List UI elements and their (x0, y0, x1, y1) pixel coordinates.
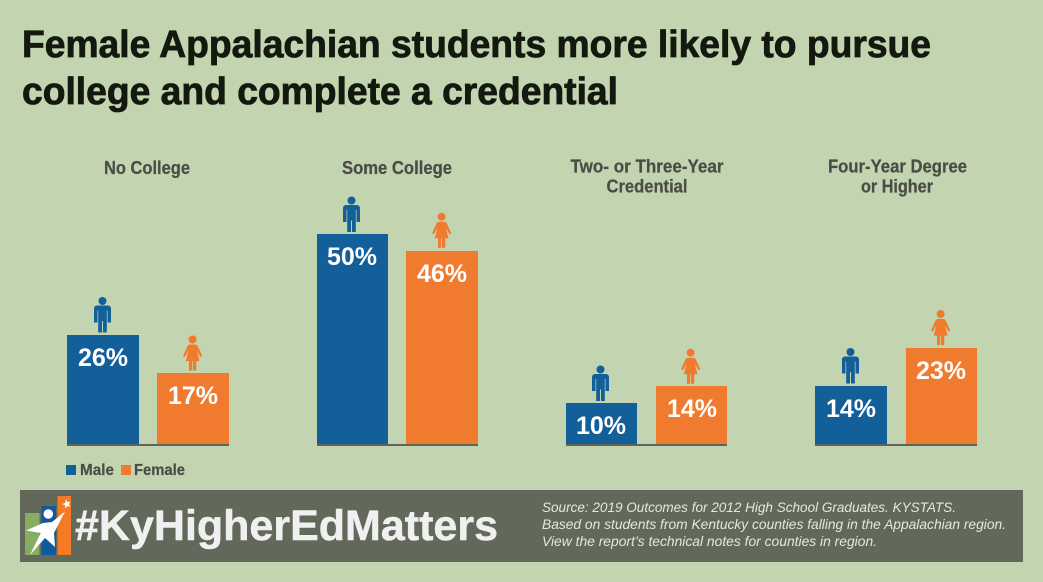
value: female 23%: 23% (916, 357, 966, 385)
baseline (317, 444, 478, 446)
value: male 26%: 26% (78, 344, 128, 372)
heading: two- or three-year credential: Credential (606, 177, 688, 197)
heading: two- or three-year credential (570, 156, 724, 197)
bar: male 14% (815, 386, 887, 445)
heading: some college: Some College (342, 158, 452, 178)
icon: female (183, 336, 202, 370)
title: college and complete a credential (22, 71, 618, 113)
legend: Male (80, 462, 114, 479)
legend: Female (134, 462, 185, 479)
heading: two- or three-year credential: Two- or Three-Year (570, 156, 724, 176)
baseline (566, 444, 727, 446)
title (22, 24, 931, 113)
source note: View the report’s technical notes for counties in region. (542, 534, 877, 549)
heading: four-year degree or higher: Four-Year Degree (828, 156, 967, 176)
source note: Source: 2019 Outcomes for 2012 High School Graduates. KYSTATS. (542, 500, 956, 515)
icon: female (681, 349, 700, 384)
hashtag: #KyHigherEdMatters (75, 502, 498, 550)
icon: female (432, 213, 451, 248)
baseline (815, 444, 977, 446)
source note: Based on students from Kentucky counties falling in the Appalachian region. (542, 517, 1006, 532)
panel: four-year degree or higher (815, 156, 977, 446)
legend (66, 462, 185, 479)
panel: some college (317, 158, 478, 446)
value: female 46%: 46% (417, 260, 467, 288)
bar: male 50% (317, 234, 388, 445)
value: female 14%: 14% (667, 395, 717, 423)
value: male 50%: 50% (327, 243, 377, 271)
bar: female 23% (906, 348, 977, 445)
icon: male (842, 348, 859, 384)
heading: four-year degree or higher: or Higher (861, 177, 933, 197)
value: male 14%: 14% (826, 395, 876, 423)
logo (25, 496, 71, 555)
icon: male (94, 297, 111, 332)
baseline (67, 444, 229, 446)
icon: male (343, 196, 360, 232)
footer band (20, 490, 1023, 562)
bar: male 26% (67, 335, 139, 445)
heading: no college: No College (104, 158, 190, 178)
value: male 10%: 10% (576, 412, 626, 440)
bar: female 14% (656, 386, 727, 445)
source note (542, 500, 1006, 549)
title: Female Appalachian students more likely to pursue (22, 24, 931, 66)
bar: male 10% (566, 403, 637, 445)
bar: female 46% (406, 251, 478, 445)
icon: male (592, 366, 609, 401)
icon: female (931, 310, 950, 345)
panel: two- or three-year credential (566, 156, 727, 446)
heading: four-year degree or higher (828, 156, 967, 197)
value: female 17%: 17% (168, 382, 218, 410)
panel: no college (67, 158, 229, 446)
bar: female 17% (157, 373, 229, 445)
